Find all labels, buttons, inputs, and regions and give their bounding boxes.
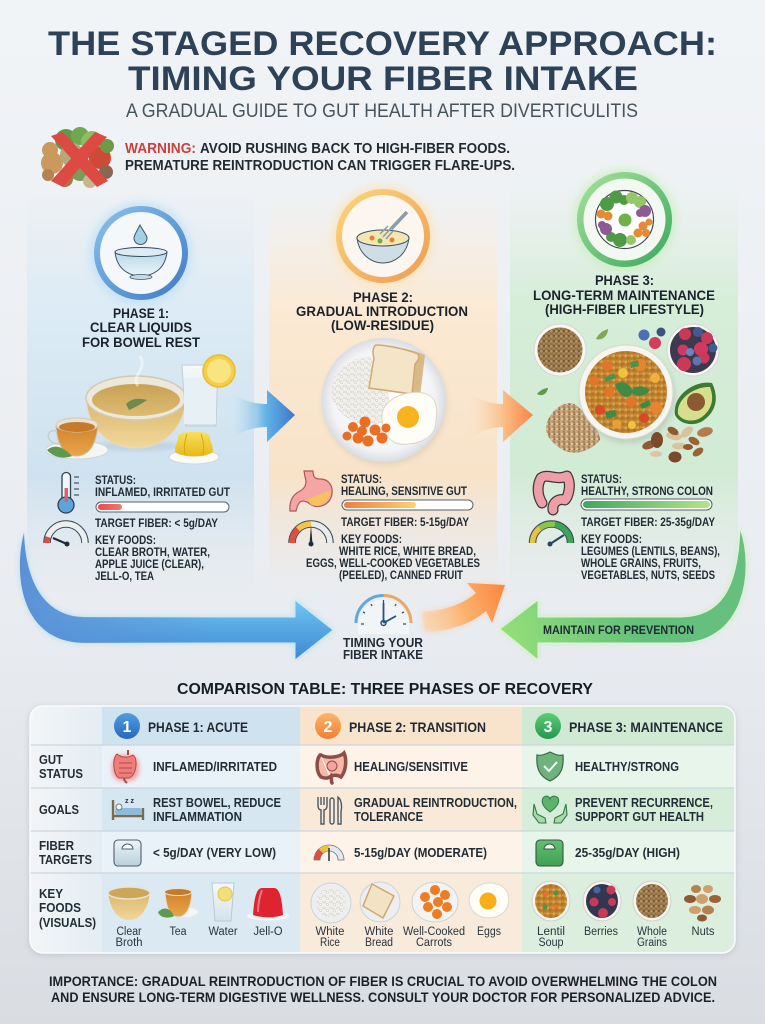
icon: hands and heart [533,796,567,823]
row labels: KEY [39,886,63,901]
loose berries and herbs [537,328,666,395]
food: clear broth [108,887,150,949]
food: carrots: Well-Cooked [403,926,465,938]
icon: clock [356,596,411,634]
key foods: LEGUMES (LENTILS, BEANS), [581,546,720,558]
berries bowl [667,324,719,376]
food: carrots [403,882,465,949]
status text: STATUS: [95,475,136,487]
status bar [96,502,229,512]
key foods: EGGS, WELL-COOKED VEGETABLES [306,558,480,570]
row labels: TARGETS [39,852,92,867]
key foods: WHITE RICE, WHITE BREAD, [339,546,476,558]
arrow: green maintain loop: MAINTAIN FOR PREVENTION [543,623,694,637]
food: tea: Tea [170,926,187,938]
table header: phase 1: PHASE 1: ACUTE [148,719,248,735]
table header: phase 3: 3 [544,719,553,736]
icon: bed: z z [125,798,134,805]
icon: bed [113,798,143,820]
broth bowl [86,356,186,451]
footer note: IMPORTANCE: GRADUAL REINTRODUCTION OF FIBER IS CRUCIAL TO AVOID OVERWHELMING THE COLON [49,973,717,989]
row: goals: TOLERANCE [354,810,423,824]
row: goals: PREVENT RECURRENCE, [575,796,713,810]
food: whole grains: Whole [637,926,667,938]
row: gut status: HEALTHY/STRONG [575,760,679,774]
table header: phase 2: PHASE 2: TRANSITION [349,719,486,735]
icon: colon [538,476,569,510]
row labels: GOALS [39,802,79,817]
comparison table [29,706,736,955]
clock label: FIBER INTAKE [343,648,423,662]
table header: phase 3: PHASE 3: MAINTENANCE [569,719,723,735]
icon: phase 2 bowl and fork [333,186,433,286]
footer note: AND ENSURE LONG-TERM DIGESTIVE WELLNESS. CONSULT YOUR DOCTOR FOR PERSONALIZED ADVICE. [51,989,715,1005]
food: eggs: Eggs [477,926,501,938]
food: white bread [360,882,400,949]
icon: gauge low [47,524,85,546]
target fiber: TARGET FIBER: 25-35g/DAY [581,517,715,529]
key foods: CLEAR BROTH, WATER, [95,547,210,559]
illustration: low residue plate [322,338,447,465]
heading: phase 1: FOR BOWEL REST [82,335,201,350]
table header: phase 2: 2 [324,719,333,736]
icon: phase 3 veggie bowl [574,170,674,270]
status bar [342,500,473,510]
row labels: FIBER [39,838,75,853]
food: lentil soup: Soup [538,937,564,949]
jello [169,432,219,464]
warning callout [41,127,515,188]
food: lentil soup: Lentil [537,926,565,938]
table header: phase 1: 1 [123,719,132,736]
icon: inflamed intestine [112,750,139,783]
fried egg [382,392,437,444]
heading: phase 3: PHASE 3: [595,273,654,288]
row: fiber targets: 25-35g/DAY (HIGH) [575,846,680,860]
stew bowl [579,345,675,443]
icon: fork and knife [318,797,342,824]
illustration: clear liquid foods [46,355,235,464]
heading: phase 2: (LOW-RESIDUE) [331,318,434,333]
icon: thermometer [58,472,79,513]
row labels [39,752,96,930]
row: fiber targets [114,840,680,866]
icon: moderate gauge [314,845,344,861]
footer note [49,973,717,1005]
panel: phase 1 [27,190,254,600]
food: white rice: Rice [320,937,340,949]
key foods: KEY FOODS: [341,534,402,546]
heading: phase 3: (HIGH-FIBER LIFESTYLE) [545,302,704,317]
icon: blue scale [114,840,141,866]
heading: phase 2: GRADUAL INTRODUCTION [296,304,468,319]
food: berries [583,881,621,938]
food: nuts: Nuts [692,926,715,938]
warning callout: AVOID RUSHING BACK TO HIGH-FIBER FOODS. [200,141,510,157]
row: fiber targets: 5-15g/DAY (MODERATE) [354,846,487,860]
arrow: green maintain loop [500,528,746,660]
food: whole grains [633,881,671,949]
row: key foods visuals [108,881,721,949]
food: berries: Berries [584,926,618,938]
icon: shield [537,752,563,781]
food: jello [247,888,289,938]
arrow: orange curve to phase 3 [422,583,505,632]
status text: HEALTHY, STRONG COLON [581,486,713,498]
toast [369,345,425,396]
panel: phase 2 [269,186,497,600]
key foods: WHOLE GRAINS, FRUITS, [581,558,701,570]
heading: phase 1 [82,306,201,350]
icon: healing intestine [317,753,346,783]
row: goals: REST BOWEL, REDUCE [153,796,281,810]
food: white rice: White [316,926,344,938]
food: white bread: Bread [365,937,393,949]
status text: STATUS: [581,474,622,486]
title: TIMING YOUR FIBER INTAKE [128,60,638,98]
heading: phase 2: PHASE 2: [353,290,413,305]
heading: phase 1: CLEAR LIQUIDS [90,320,192,335]
target fiber: TARGET FIBER: < 5g/DAY [95,518,218,530]
key foods [95,535,210,583]
warning callout: WARNING: [125,141,196,157]
food: water [208,883,238,938]
row: goals [113,796,713,824]
key foods: KEY FOODS: [581,534,642,546]
clock label: TIMING YOUR [343,636,423,650]
icon: gauge moderate [292,524,330,546]
row: goals: GRADUAL REINTRODUCTION, [354,796,517,810]
food: whole grains: Grains [637,937,667,949]
row labels: FOODS [39,900,81,915]
status bar [581,499,712,510]
status text [95,475,230,499]
table header: phase 3 [535,713,723,739]
key foods: VEGETABLES, NUTS, SEEDS [581,570,715,582]
row: gut status: INFLAMED/IRRITATED [153,760,277,774]
heading: phase 3 [533,273,715,317]
lentil bowl [534,324,586,376]
status text: HEALING, SENSITIVE GUT [341,486,467,498]
title [48,25,717,98]
key foods: KEY FOODS: [95,535,156,547]
food: clear broth: Broth [116,937,142,949]
food: white rice [311,883,351,949]
arrow: phase 2 to phase 3 [468,390,533,442]
avocado [675,383,716,424]
arrow: large blue curve to timing [20,533,333,660]
key foods [306,534,480,582]
nuts [641,424,714,462]
row: gut status [112,750,679,783]
icon: stomach [290,471,332,511]
status text [341,474,467,498]
food: white bread: White [364,926,394,938]
icon: green scale [536,840,563,866]
key foods: JELL-O, TEA [95,571,154,583]
table header: phase 1 [114,713,248,739]
food: water: Water [208,926,238,938]
status text: INFLAMED, IRRITATED GUT [95,487,230,499]
row: gut status: HEALING/SENSITIVE [354,760,468,774]
title: THE STAGED RECOVERY APPROACH: [48,25,717,63]
food: tea [158,888,198,938]
row labels: STATUS [39,766,83,781]
table header: phase 2 [315,713,486,739]
food: clear broth: Clear [116,926,142,938]
row: fiber targets: < 5g/DAY (VERY LOW) [153,846,276,860]
key foods: APPLE JUICE (CLEAR), [95,559,204,571]
subtitle: A GRADUAL GUIDE TO GUT HEALTH AFTER DIVERTICULITIS [126,101,638,122]
status text [581,474,713,498]
clock label [343,636,423,662]
key foods [581,534,720,582]
grain pile [546,403,600,453]
heading: phase 2 [296,290,468,333]
water glass with lemon [182,355,235,426]
icon: crossed-out high-fiber foods [41,127,114,188]
row labels: (VISUALS) [39,915,96,930]
status text: STATUS: [341,474,382,486]
food: jello: Jell-O [254,926,283,938]
arrow: phase 1 to phase 2 [230,390,295,442]
row: goals: SUPPORT GUT HEALTH [575,810,704,824]
food: lentil soup [532,881,570,949]
tea cup [46,418,108,459]
panel: phase 3 [510,170,738,600]
illustration: high fiber foods [534,324,719,462]
heading: phase 1: PHASE 1: [113,306,169,321]
row labels: GUT [39,752,63,767]
carrots [342,416,390,446]
icon: phase 1 bowl and drop [91,203,191,303]
icon: gauge high [532,524,570,546]
warning callout: PREMATURE REINTRODUCTION CAN TRIGGER FLARE-UPS. [125,158,515,174]
comparison table heading: COMPARISON TABLE: THREE PHASES OF RECOVERY [177,681,593,698]
heading: phase 3: LONG-TERM MAINTENANCE [533,288,715,303]
white rice [331,357,389,425]
target fiber: TARGET FIBER: 5-15g/DAY [341,517,469,529]
key foods: (PEELED), CANNED FRUIT [339,570,463,582]
food: carrots: Carrots [416,937,452,949]
food: eggs [469,883,509,938]
food: nuts [684,885,721,938]
row: goals: INFLAMMATION [153,810,242,824]
